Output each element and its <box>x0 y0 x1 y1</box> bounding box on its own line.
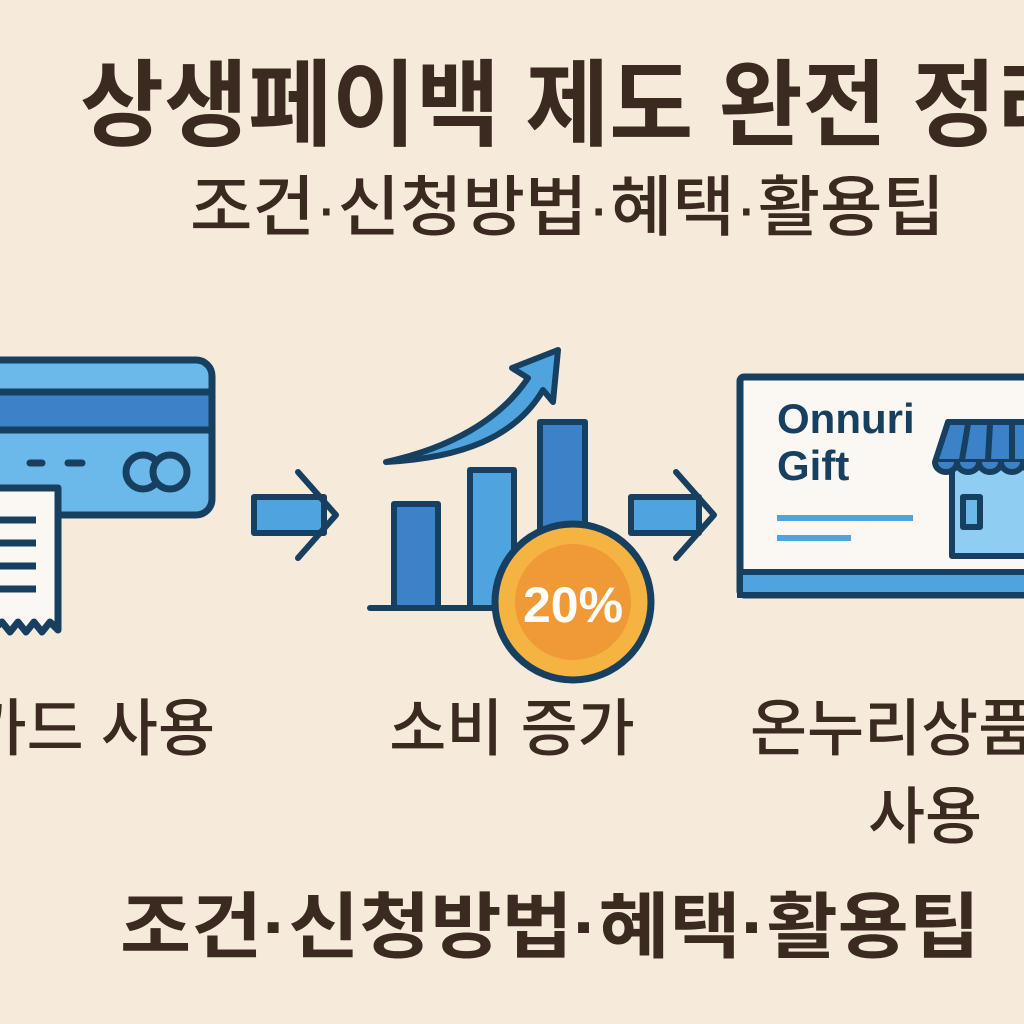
bottom caption: 조건·신청방법·혜택·활용팁 <box>120 888 980 968</box>
arrow 1 <box>254 472 336 558</box>
store <box>935 422 1024 556</box>
badge: 20% coin: 20% <box>523 577 623 633</box>
label: onnuri voucher use <box>750 695 1024 852</box>
icon: credit card with receipt <box>0 360 212 632</box>
icon: Onnuri gift screen with store: Gift <box>777 442 849 489</box>
label: spending increase: 소비 증가 <box>389 695 635 764</box>
icon: Onnuri gift screen with store <box>740 377 1024 595</box>
arrow 2 <box>631 472 714 558</box>
icon: bar chart with rising arrow <box>370 350 585 608</box>
subtitle: 조건·신청방법·혜택·활용팁 <box>190 170 945 244</box>
receipt <box>0 488 58 632</box>
badge: 20% coin <box>495 524 651 680</box>
label: onnuri voucher use: 사용 <box>868 783 982 852</box>
icon: Onnuri gift screen with store: Onnuri <box>777 395 915 442</box>
title: 상생페이백 제도 완전 정리 <box>80 53 1024 159</box>
